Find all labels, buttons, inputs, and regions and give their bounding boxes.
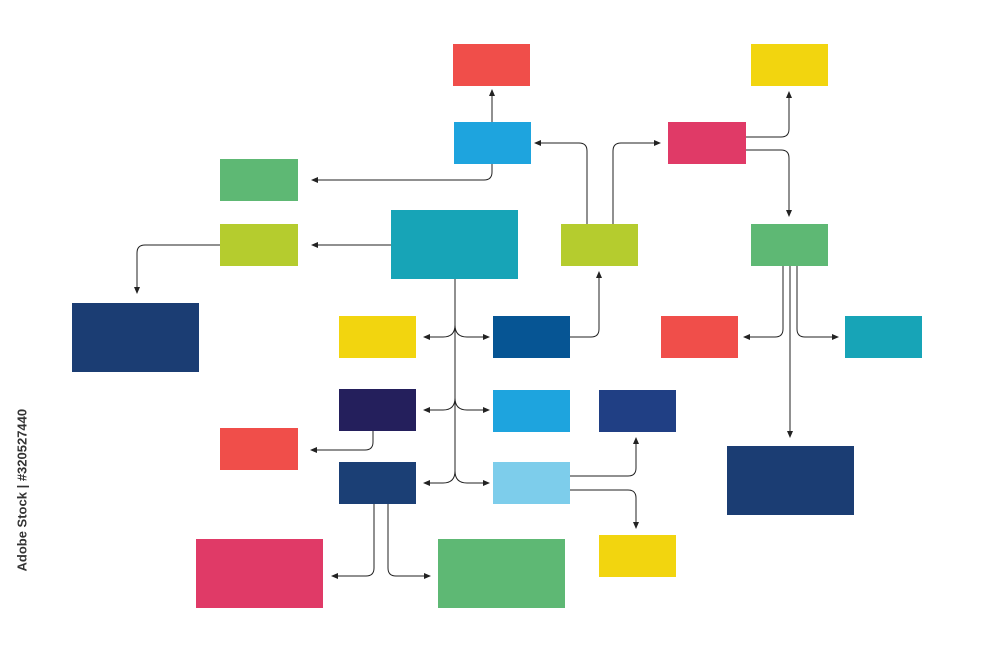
box: pink top right: [668, 122, 746, 164]
box: red left: [220, 428, 298, 470]
box: lime left: [220, 224, 298, 266]
watermark id text: Adobe Stock | #320527440: [14, 409, 30, 572]
box: red top: [453, 44, 530, 86]
box: navy lower: [339, 462, 416, 504]
box: teal right: [845, 316, 922, 358]
box: green left: [220, 159, 298, 201]
box: dark blue middle: [493, 316, 570, 358]
box: red right: [661, 316, 738, 358]
box: green big: [438, 539, 565, 608]
box: yellow top right: [751, 44, 828, 86]
box: navy big left: [72, 303, 199, 372]
box: blue middle: [493, 390, 570, 432]
box: navy small: [599, 390, 676, 432]
box: light blue: [493, 462, 570, 504]
box: blue top: [454, 122, 531, 164]
box: yellow bottom: [599, 535, 676, 577]
box: indigo: [339, 389, 416, 431]
connectors: [137, 90, 838, 576]
box: navy big right: [727, 446, 854, 515]
box: central teal: [391, 210, 518, 279]
box: green right: [751, 224, 828, 266]
box: lime center: [561, 224, 638, 266]
box: pink big: [196, 539, 323, 608]
box: yellow middle: [339, 316, 416, 358]
